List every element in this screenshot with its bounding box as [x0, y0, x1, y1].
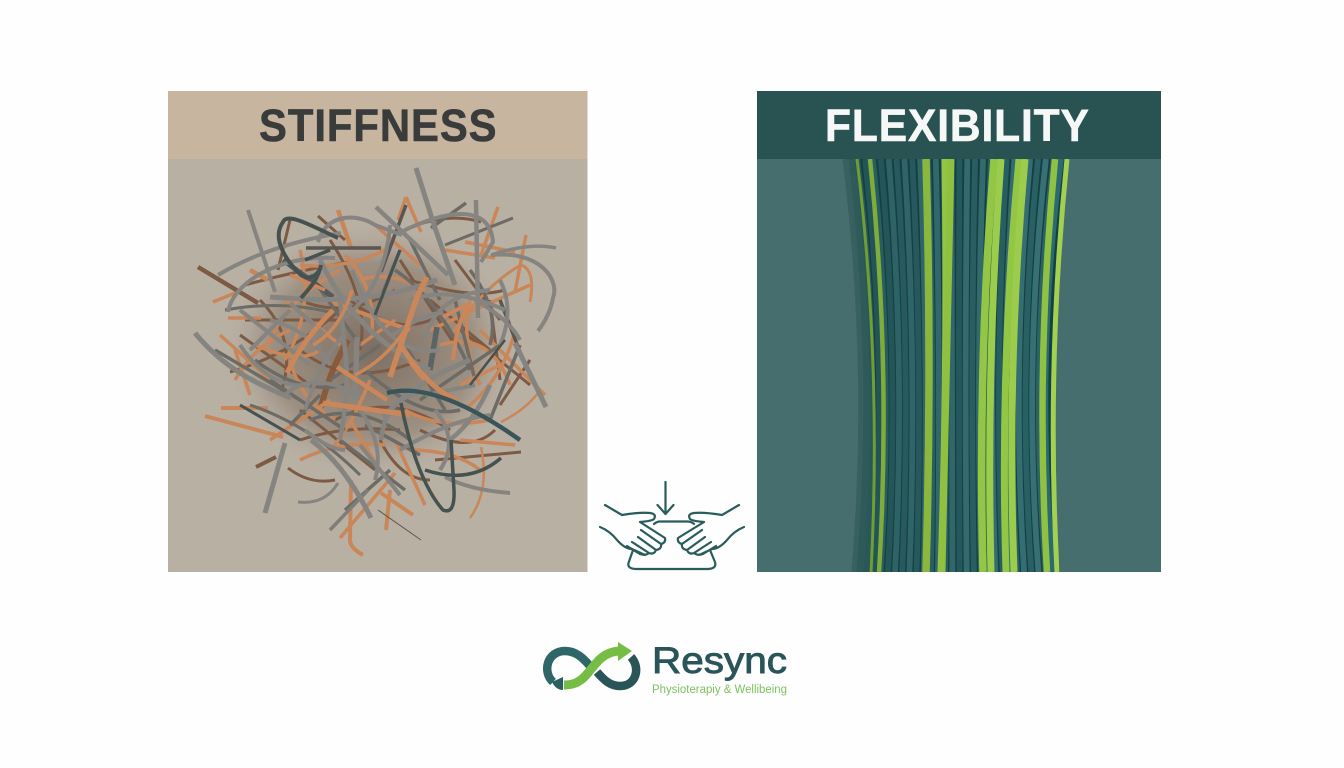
panel: flexibility [757, 91, 1161, 572]
right hand [678, 505, 744, 555]
icon: hands pressing pillow [600, 482, 744, 569]
panel: stiffness [168, 91, 588, 572]
panel background: flexibility [757, 91, 1161, 572]
arrow: downward pressure [658, 482, 674, 514]
aligned fibres illustration [845, 159, 1069, 572]
tangled fibres illustration [195, 168, 556, 555]
heading band: stiffness [168, 91, 588, 159]
logo tagline: Physioterapiy & Wellibeing [652, 684, 787, 696]
heading: FLEXIBILITY: FLEXIBILITY [825, 101, 1090, 151]
heading band: flexibility [757, 91, 1161, 159]
pillow outline [628, 522, 715, 569]
logo wordmark: Resync [652, 640, 787, 681]
heading: STIFFNESS: STIFFNESS [259, 102, 497, 151]
logo icon: infinity arrow [547, 642, 636, 690]
left hand [600, 505, 665, 555]
logo: Resync [547, 640, 787, 696]
panel background: stiffness [168, 91, 588, 572]
